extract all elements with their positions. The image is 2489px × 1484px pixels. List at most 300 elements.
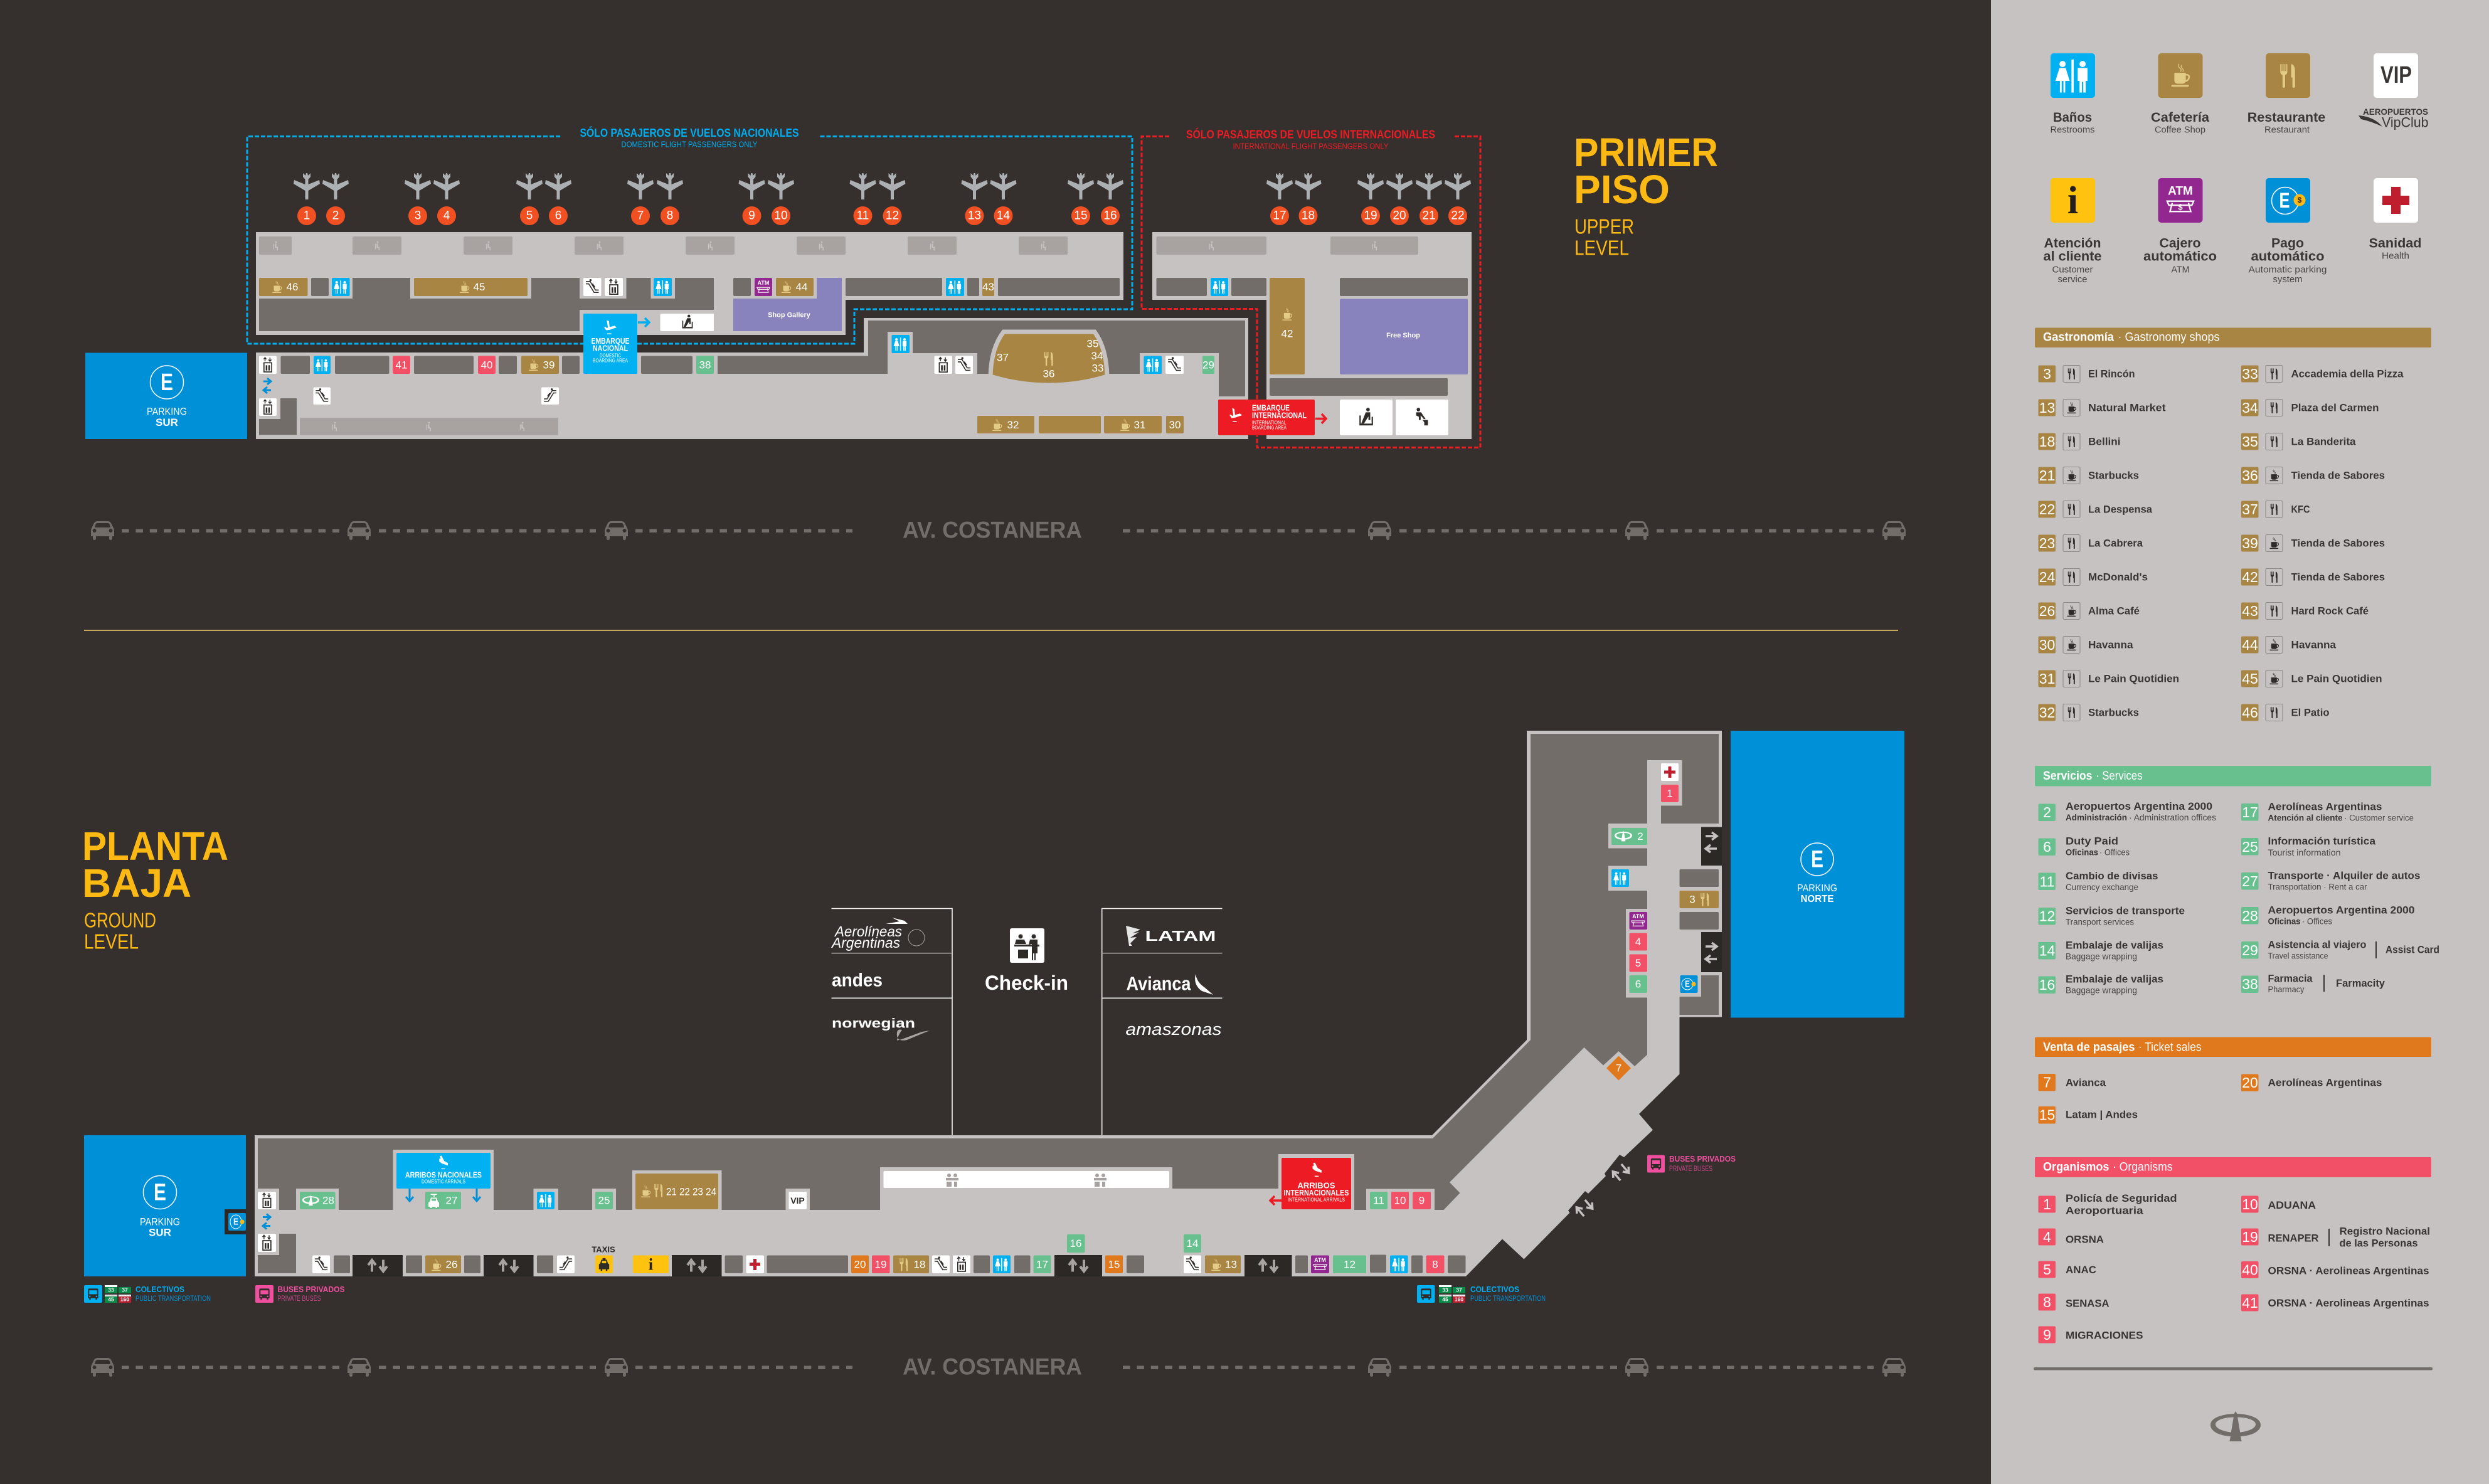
heading: international passengers only bbox=[1186, 128, 1435, 151]
parking south ground: E bbox=[233, 1217, 238, 1227]
legend: automatic parking: $ bbox=[2298, 196, 2302, 204]
services list column 2: Aerolíneas Argentinas bbox=[2268, 800, 2382, 813]
organisms list column 1: Policía de Seguridad bbox=[2066, 1192, 2177, 1204]
building: terminal hall bbox=[256, 318, 1248, 439]
gates: numbered circles: 11 bbox=[857, 209, 869, 222]
legend: restaurant bbox=[2248, 53, 2325, 135]
domestic arrivals sign: ARRIBOS NACIONALES bbox=[405, 1170, 482, 1179]
ticket sales list: 15 bbox=[2039, 1106, 2055, 1123]
organism boxes: 10 bbox=[1394, 1194, 1406, 1207]
gates: numbered circles: 20 bbox=[1393, 209, 1406, 222]
international arrivals sign: INTERNACIONALES bbox=[1283, 1188, 1349, 1197]
organisms list column 1: 5 bbox=[2043, 1261, 2051, 1278]
ATM bbox=[755, 278, 772, 296]
elevators and escalators bbox=[258, 1192, 1201, 1273]
public transport: south: 33 bbox=[108, 1287, 114, 1293]
gastronomy boxes: 21 22 23 24 bbox=[666, 1185, 716, 1198]
legend: restrooms: Baños bbox=[2053, 110, 2092, 125]
gastronomy list column 1: McDonald's bbox=[2088, 571, 2148, 583]
organisms list column 2: de las Personas bbox=[2340, 1237, 2417, 1249]
services list column 1 bbox=[2039, 800, 2216, 995]
organisms list column 1: Aeroportuaria bbox=[2066, 1204, 2143, 1217]
store 44 bbox=[776, 278, 814, 296]
services list column 1: Duty Paid bbox=[2066, 835, 2118, 847]
service boxes 38, 29 bbox=[696, 356, 1214, 374]
organism boxes: 9 bbox=[1419, 1194, 1425, 1207]
title: primer piso bbox=[1574, 130, 1718, 260]
ticket sales header: Venta de pasajes bbox=[2043, 1041, 2135, 1054]
gastronomy list column 1: Starbucks bbox=[2088, 469, 2139, 482]
parking north: E bbox=[1811, 847, 1823, 873]
legend: ATM bbox=[2143, 178, 2217, 275]
gastronomy list column 2: 45 bbox=[2242, 670, 2258, 687]
shop gallery: Shop Gallery bbox=[768, 311, 811, 319]
shop gallery bbox=[733, 278, 842, 331]
ticket sales header: · Ticket sales bbox=[2138, 1041, 2202, 1054]
legend: coffee shop: Cafetería bbox=[2151, 110, 2209, 125]
services list column 2: 27 bbox=[2242, 873, 2258, 889]
service boxes 38, 29: 29 bbox=[1202, 359, 1214, 371]
public transport: south: PUBLIC TRANSPORTATION bbox=[135, 1294, 211, 1303]
road: av. costanera upper bbox=[91, 517, 1906, 543]
logo: norwegian bbox=[832, 1016, 930, 1041]
public transport: south: 45 bbox=[108, 1296, 114, 1302]
store 45 bbox=[414, 278, 528, 296]
services list column 2: Transportation · Rent a car bbox=[2268, 882, 2367, 892]
gastronomy list column 1: 18 bbox=[2039, 433, 2055, 450]
store 44: 44 bbox=[796, 281, 807, 293]
services list column 1: 2 bbox=[2043, 804, 2051, 820]
logo: Aeropuertos Argentina 2000 bbox=[2210, 1411, 2261, 1441]
title: planta baja: GROUND bbox=[84, 908, 156, 932]
organism boxes: 1 bbox=[1667, 788, 1673, 799]
gates: numbered circles: 15 bbox=[1074, 209, 1088, 222]
services list column 2: Tourist information bbox=[2268, 848, 2341, 857]
parking payment north bbox=[1680, 975, 1697, 993]
domestic boarding sign: BOARDING AREA bbox=[593, 358, 629, 364]
door recesses bbox=[1701, 827, 1722, 972]
international boarding sign bbox=[1218, 400, 1326, 435]
parking north: PARKING bbox=[1797, 883, 1837, 894]
heading: domestic passengers only bbox=[580, 126, 799, 149]
service boxes: 27 bbox=[446, 1194, 457, 1207]
store 42: 42 bbox=[1282, 327, 1293, 340]
gastronomy list column 1: 24 bbox=[2039, 569, 2055, 585]
food court bbox=[990, 332, 1107, 385]
gastronomy list column 1: 21 bbox=[2039, 467, 2055, 484]
legend: restaurant: Restaurant bbox=[2264, 124, 2310, 135]
entrance arrows bbox=[263, 378, 271, 393]
store 45: 45 bbox=[474, 281, 485, 293]
public transport: north: 160 bbox=[1455, 1296, 1463, 1302]
logo: avianca: Avianca bbox=[1127, 972, 1191, 995]
services header: · Services bbox=[2096, 770, 2143, 783]
organisms header bbox=[2035, 1157, 2431, 1177]
services list column 1: · Administration offices bbox=[2129, 813, 2216, 822]
international arrivals sign: INTERNATIONAL ARRIVALS bbox=[1288, 1197, 1345, 1203]
store 39: 39 bbox=[543, 359, 555, 371]
legend: customer service bbox=[2044, 178, 2101, 285]
gastronomy list column 2: Plaza del Carmen bbox=[2291, 401, 2379, 414]
legend: VIP: AEROPUERTOS bbox=[2363, 107, 2428, 117]
legend: health: Sanidad bbox=[2369, 236, 2421, 251]
gates: numbered circles: 16 bbox=[1103, 209, 1117, 222]
legend: customer service: al cliente bbox=[2044, 250, 2101, 263]
organisms list column 2: 41 bbox=[2242, 1295, 2258, 1311]
gastronomy list column 2: 36 bbox=[2242, 467, 2258, 484]
organisms list column 1: SENASA bbox=[2066, 1297, 2109, 1310]
legend: customer service: i bbox=[2067, 179, 2078, 222]
VIP box: VIP bbox=[790, 1195, 805, 1206]
logo: andes: andes bbox=[832, 970, 883, 991]
store 42 bbox=[1270, 278, 1305, 374]
non-public dark areas bbox=[258, 734, 1719, 1210]
gastronomy list column 2: 44 bbox=[2242, 637, 2258, 653]
services list column 1: Embalaje de valijas bbox=[2066, 973, 2163, 985]
stores 32, 31, 30: 31 bbox=[1134, 419, 1145, 431]
service boxes: 14 bbox=[1187, 1238, 1198, 1249]
gates: numbered circles: 10 bbox=[774, 209, 788, 222]
legend: automatic parking: system bbox=[2273, 274, 2302, 285]
building: international pier bbox=[1152, 232, 1472, 439]
parking south ground: E bbox=[154, 1179, 166, 1206]
ATM boxes bbox=[1311, 912, 1647, 1273]
gastronomy list column 2 bbox=[2241, 365, 2404, 721]
dashed boundary: international area bbox=[1142, 137, 1480, 448]
ticket sales header bbox=[2035, 1037, 2431, 1057]
stores 32, 31, 30: 30 bbox=[1169, 419, 1181, 431]
parking south upper bbox=[85, 352, 247, 439]
service boxes: 17 bbox=[1036, 1258, 1048, 1271]
security check desks bbox=[660, 314, 1448, 435]
services list column 2 bbox=[2241, 800, 2439, 994]
services list column 1: Aeropuertos Argentina 2000 bbox=[2066, 800, 2212, 812]
legend: ATM: automático bbox=[2143, 250, 2217, 263]
ticket sales list: 20 bbox=[2242, 1074, 2258, 1091]
domestic boarding sign bbox=[583, 314, 649, 374]
services list column 1: Transport services bbox=[2066, 917, 2134, 927]
parking south ground bbox=[84, 1135, 246, 1276]
organisms list column 1: 9 bbox=[2043, 1327, 2051, 1343]
service boxes: 16 bbox=[1070, 1238, 1081, 1249]
ticket sales list bbox=[2039, 1074, 2382, 1124]
ATM boxes: ATM bbox=[1632, 913, 1644, 920]
check-in counters bbox=[883, 1171, 1169, 1188]
gastronomy list column 2: 34 bbox=[2242, 400, 2258, 416]
building: ground floor outline bbox=[255, 731, 1722, 1276]
ticket sale boxes: 15 bbox=[1108, 1258, 1120, 1271]
organisms list column 1 bbox=[2039, 1192, 2177, 1344]
gastronomy header: · Gastronomy shops bbox=[2118, 331, 2219, 344]
services header: Servicios bbox=[2043, 770, 2093, 783]
gastronomy list column 2: El Patio bbox=[2291, 706, 2330, 719]
gastronomy list column 1: 3 bbox=[2043, 366, 2051, 382]
private buses: south: BUSES PRIVADOS bbox=[277, 1285, 345, 1294]
gastronomy boxes bbox=[425, 891, 1719, 1273]
legend: ATM: ATM bbox=[2168, 184, 2193, 198]
logo: aerolineas argentinas: Aerolíneas bbox=[834, 923, 902, 940]
gastronomy list column 1: La Despensa bbox=[2088, 503, 2153, 516]
organism boxes: 5 bbox=[1635, 957, 1641, 969]
parking north: NORTE bbox=[1800, 894, 1834, 904]
gates: numbered circles: 4 bbox=[443, 209, 450, 222]
road: av. costanera lower bbox=[91, 1354, 1906, 1380]
ATM boxes: ATM bbox=[1314, 1257, 1326, 1263]
panel: upper level map bbox=[85, 126, 1480, 448]
food court: 33 bbox=[1092, 363, 1103, 374]
organisms list column 2: Registro Nacional bbox=[2340, 1226, 2430, 1237]
services list column 2: Información turística bbox=[2268, 835, 2376, 847]
gastronomy list column 1: Havanna bbox=[2088, 639, 2133, 651]
store 46: 46 bbox=[287, 281, 298, 293]
escalators and elevators bbox=[259, 278, 1184, 416]
gates: numbered circles bbox=[297, 206, 1467, 225]
public transport: south bbox=[84, 1285, 211, 1303]
ticket sales list: Aerolíneas Argentinas bbox=[2268, 1076, 2382, 1089]
gates: numbered circles: 6 bbox=[555, 209, 561, 222]
gastronomy list column 1: 31 bbox=[2039, 670, 2055, 687]
stairs to street bbox=[353, 1255, 1292, 1276]
legend: VIP: VIP bbox=[2380, 62, 2412, 88]
gastronomy list column 2: 33 bbox=[2242, 366, 2258, 382]
VIP box bbox=[789, 1192, 807, 1209]
organisms list column 2: 19 bbox=[2242, 1229, 2258, 1245]
food court: 34 bbox=[1091, 350, 1103, 362]
services list column 1: 12 bbox=[2039, 908, 2055, 925]
services list column 1: Cambio de divisas bbox=[2066, 870, 2158, 882]
organisms list column 1: ANAC bbox=[2066, 1264, 2096, 1276]
services list column 1: 16 bbox=[2039, 977, 2055, 993]
gates: numbered circles: 9 bbox=[748, 209, 755, 222]
services list column 2: 17 bbox=[2242, 804, 2258, 820]
heading: domestic passengers only: SÓLO PASAJEROS DE VUELOS NACIONALES bbox=[580, 126, 799, 139]
food court: 35 bbox=[1087, 337, 1098, 350]
dashed boundary: domestic area bbox=[247, 137, 1132, 344]
logo: latam bbox=[1126, 926, 1216, 946]
services list column 1: Embalaje de valijas bbox=[2066, 940, 2163, 951]
public transport: south: 37 bbox=[122, 1287, 128, 1293]
gastronomy boxes: 3 bbox=[1689, 893, 1696, 906]
legend: customer service: service bbox=[2057, 274, 2088, 285]
store 43: 43 bbox=[982, 281, 994, 293]
organisms list column 2: RENAPER bbox=[2268, 1232, 2318, 1244]
service boxes: 6 bbox=[1635, 978, 1641, 990]
gastronomy list column 2: Tienda de Sabores bbox=[2291, 571, 2385, 583]
gates: numbered circles: 8 bbox=[667, 209, 673, 222]
legend: ATM: ATM bbox=[2172, 265, 2189, 275]
services list column 2: 25 bbox=[2242, 839, 2258, 855]
service boxes: 25 bbox=[598, 1194, 610, 1207]
legend: ATM: Cajero bbox=[2159, 236, 2200, 251]
panel: check-in airlines bbox=[831, 908, 1222, 1171]
gastronomy list column 1 bbox=[2039, 365, 2179, 721]
service boxes: 2 bbox=[1637, 830, 1643, 842]
legend: health: Health bbox=[2382, 251, 2409, 261]
gates: numbered circles: 5 bbox=[526, 209, 533, 222]
taxi stop bbox=[592, 1244, 615, 1273]
services list column 2: · Offices bbox=[2302, 917, 2332, 926]
services list column 1: Administración bbox=[2066, 813, 2127, 822]
panel: ground level map bbox=[84, 731, 1904, 1276]
gates: numbered circles: 22 bbox=[1451, 209, 1465, 222]
title: planta baja: LEVEL bbox=[84, 930, 139, 953]
domestic boarding sign: NACIONAL bbox=[593, 344, 628, 352]
health posts bbox=[746, 763, 1679, 1273]
title: planta baja: PLANTA bbox=[82, 824, 228, 869]
title: planta baja: BAJA bbox=[82, 861, 191, 906]
non-public dark areas bbox=[259, 278, 1468, 435]
heading: international passengers only: INTERNATIONAL FLIGHT PASSENGERS ONLY bbox=[1233, 142, 1389, 151]
organisms list column 2: 40 bbox=[2242, 1262, 2258, 1278]
domestic boarding sign: DOMESTIC bbox=[600, 352, 621, 359]
gastronomy list column 1: Starbucks bbox=[2088, 706, 2139, 719]
title: primer piso: LEVEL bbox=[1574, 236, 1629, 260]
private buses: north bbox=[1647, 1155, 1736, 1173]
heading: international passengers only: SÓLO PASAJEROS DE VUELOS INTERNACIONALES bbox=[1186, 128, 1435, 140]
legend: customer service: Customer bbox=[2052, 265, 2093, 275]
legend: ATM: $ bbox=[2178, 202, 2183, 212]
services list column 2: 28 bbox=[2242, 908, 2258, 924]
gastronomy list column 2: 39 bbox=[2242, 535, 2258, 551]
parking south upper: E bbox=[161, 369, 173, 396]
stores 32, 31, 30: 32 bbox=[1007, 419, 1019, 431]
ticket sales list: 7 bbox=[2043, 1074, 2051, 1090]
private buses: south bbox=[255, 1285, 345, 1303]
public transport: north: 37 bbox=[1456, 1287, 1462, 1293]
services list column 1: Baggage wrapping bbox=[2066, 986, 2137, 995]
legend: automatic parking bbox=[2248, 178, 2327, 285]
title: planta baja bbox=[82, 824, 228, 953]
gastronomy header bbox=[2035, 327, 2431, 347]
gastronomy list column 1: 26 bbox=[2039, 603, 2055, 619]
international arrivals sign bbox=[1270, 1158, 1351, 1209]
gastronomy list column 2: 42 bbox=[2242, 569, 2258, 585]
services list column 1: Servicios de transporte bbox=[2066, 904, 2185, 917]
services list column 1: 14 bbox=[2039, 942, 2055, 958]
service boxes: 28 bbox=[322, 1194, 334, 1207]
gastronomy boxes: 18 bbox=[914, 1258, 925, 1271]
gates: numbered circles: 21 bbox=[1422, 209, 1436, 222]
legend: automatic parking: Pago bbox=[2271, 236, 2304, 251]
organism boxes 41, 40 bbox=[393, 356, 496, 374]
gastronomy list column 1: 23 bbox=[2039, 535, 2055, 551]
road: av. costanera lower: AV. COSTANERA bbox=[903, 1354, 1082, 1380]
services list column 1: 6 bbox=[2043, 839, 2051, 855]
services header bbox=[2035, 766, 2431, 787]
service boxes 38, 29: 38 bbox=[699, 359, 711, 371]
check-in label: Check-in bbox=[985, 972, 1068, 994]
gastronomy list column 1: La Cabrera bbox=[2088, 537, 2143, 549]
organism boxes 41, 40: 40 bbox=[481, 359, 492, 371]
duty free shop: Free Shop bbox=[1386, 332, 1420, 339]
gates: numbered circles: 12 bbox=[886, 209, 899, 222]
check-in guide lines bbox=[832, 908, 1222, 1171]
organisms list column 2: ORSNA · Aerolineas Argentinas bbox=[2268, 1264, 2429, 1277]
store 43 bbox=[982, 278, 994, 296]
gastronomy list column 2: 35 bbox=[2242, 433, 2258, 450]
service boxes: 12 bbox=[1344, 1258, 1356, 1271]
logo: norwegian: norwegian bbox=[832, 1016, 915, 1031]
gastronomy list column 2: Havanna bbox=[2291, 639, 2337, 651]
information desk: i bbox=[649, 1256, 653, 1273]
organisms list column 1: 1 bbox=[2043, 1196, 2051, 1212]
road: av. costanera upper: AV. COSTANERA bbox=[903, 517, 1082, 543]
stores 32, 31, 30 bbox=[977, 416, 1184, 433]
organisms list column 1: 4 bbox=[2043, 1229, 2051, 1245]
door and ramp arrows bbox=[263, 832, 1717, 1229]
heading: domestic passengers only: DOMESTIC FLIGHT PASSENGERS ONLY bbox=[621, 139, 758, 149]
organisms list column 2: ADUANA bbox=[2268, 1199, 2316, 1211]
gates: numbered circles: 3 bbox=[415, 209, 421, 222]
duty free shop bbox=[1340, 299, 1468, 374]
legend: health bbox=[2369, 178, 2421, 261]
gates: numbered circles: 17 bbox=[1273, 209, 1287, 222]
information desk bbox=[633, 1256, 669, 1273]
public transport: south: COLECTIVOS bbox=[135, 1285, 184, 1294]
section: services bbox=[2035, 766, 2439, 995]
services list column 2: Transporte · Alquiler de autos bbox=[2268, 869, 2420, 882]
gastronomy list column 2: Accademia della Pizza bbox=[2291, 368, 2404, 380]
organism boxes: 19 bbox=[875, 1258, 886, 1271]
gastronomy list column 2: Tienda de Sabores bbox=[2291, 469, 2385, 482]
section: gastronomy bbox=[2035, 327, 2431, 721]
section: organisms bbox=[2035, 1157, 2431, 1344]
public transport: north: 33 bbox=[1442, 1287, 1448, 1293]
panel: legend sidebar bbox=[1991, 0, 2489, 1484]
seating areas bbox=[259, 236, 1418, 435]
legend: VIP: VipClub bbox=[2382, 114, 2429, 130]
organisms list column 2: ORSNA · Aerolineas Argentinas bbox=[2268, 1297, 2429, 1309]
parking south ground: SUR bbox=[149, 1227, 171, 1238]
gastronomy boxes: 26 bbox=[446, 1258, 457, 1271]
gastronomy list column 1: 22 bbox=[2039, 501, 2055, 517]
service boxes bbox=[300, 828, 1647, 1273]
domestic arrivals sign: DOMESTIC ARRIVALS bbox=[422, 1179, 465, 1184]
services list column 2: Travel assistance bbox=[2268, 951, 2328, 961]
legend: VIP bbox=[2359, 53, 2429, 130]
services list column 1: Oficinas bbox=[2066, 848, 2098, 857]
gastronomy list column 2: KFC bbox=[2291, 503, 2310, 516]
public transport: north bbox=[1417, 1285, 1546, 1303]
organism boxes: 4 bbox=[1635, 936, 1641, 948]
legend: coffee shop: Coffee Shop bbox=[2155, 124, 2205, 135]
services list column 2: · Customer service bbox=[2344, 813, 2414, 823]
legend: customer service: Atención bbox=[2044, 236, 2101, 251]
public transport: north: PUBLIC TRANSPORTATION bbox=[1470, 1294, 1546, 1303]
ticket sales list: Latam | Andes bbox=[2066, 1109, 2138, 1120]
check-in icon bbox=[1010, 928, 1044, 963]
restrooms bbox=[537, 869, 1629, 1273]
title: primer piso: PRIMER bbox=[1574, 130, 1718, 175]
international boarding sign: INTERNATIONAL bbox=[1252, 420, 1287, 425]
legend: automatic parking: Automatic parking bbox=[2248, 265, 2327, 275]
parking south ground: PARKING bbox=[140, 1216, 180, 1228]
organism boxes bbox=[872, 785, 1679, 1273]
gastronomy list column 1: Natural Market bbox=[2088, 401, 2166, 414]
gastronomy list column 1: Le Pain Quotidien bbox=[2088, 672, 2179, 685]
gastronomy list column 1: 30 bbox=[2039, 637, 2055, 653]
building: domestic pier bbox=[256, 232, 1123, 335]
private buses: north: PRIVATE BUSES bbox=[1669, 1164, 1712, 1173]
taxi stop: TAXIS bbox=[592, 1244, 615, 1254]
legend icons bbox=[2044, 53, 2429, 285]
legend: restaurant: Restaurante bbox=[2248, 110, 2325, 125]
services list column 2: Atención al cliente bbox=[2268, 813, 2343, 823]
parking south upper: SUR bbox=[156, 416, 178, 428]
gastronomy list column 2: Hard Rock Café bbox=[2291, 605, 2369, 617]
organisms list column 2: 10 bbox=[2242, 1196, 2258, 1212]
private buses: south: PRIVATE BUSES bbox=[277, 1294, 321, 1303]
